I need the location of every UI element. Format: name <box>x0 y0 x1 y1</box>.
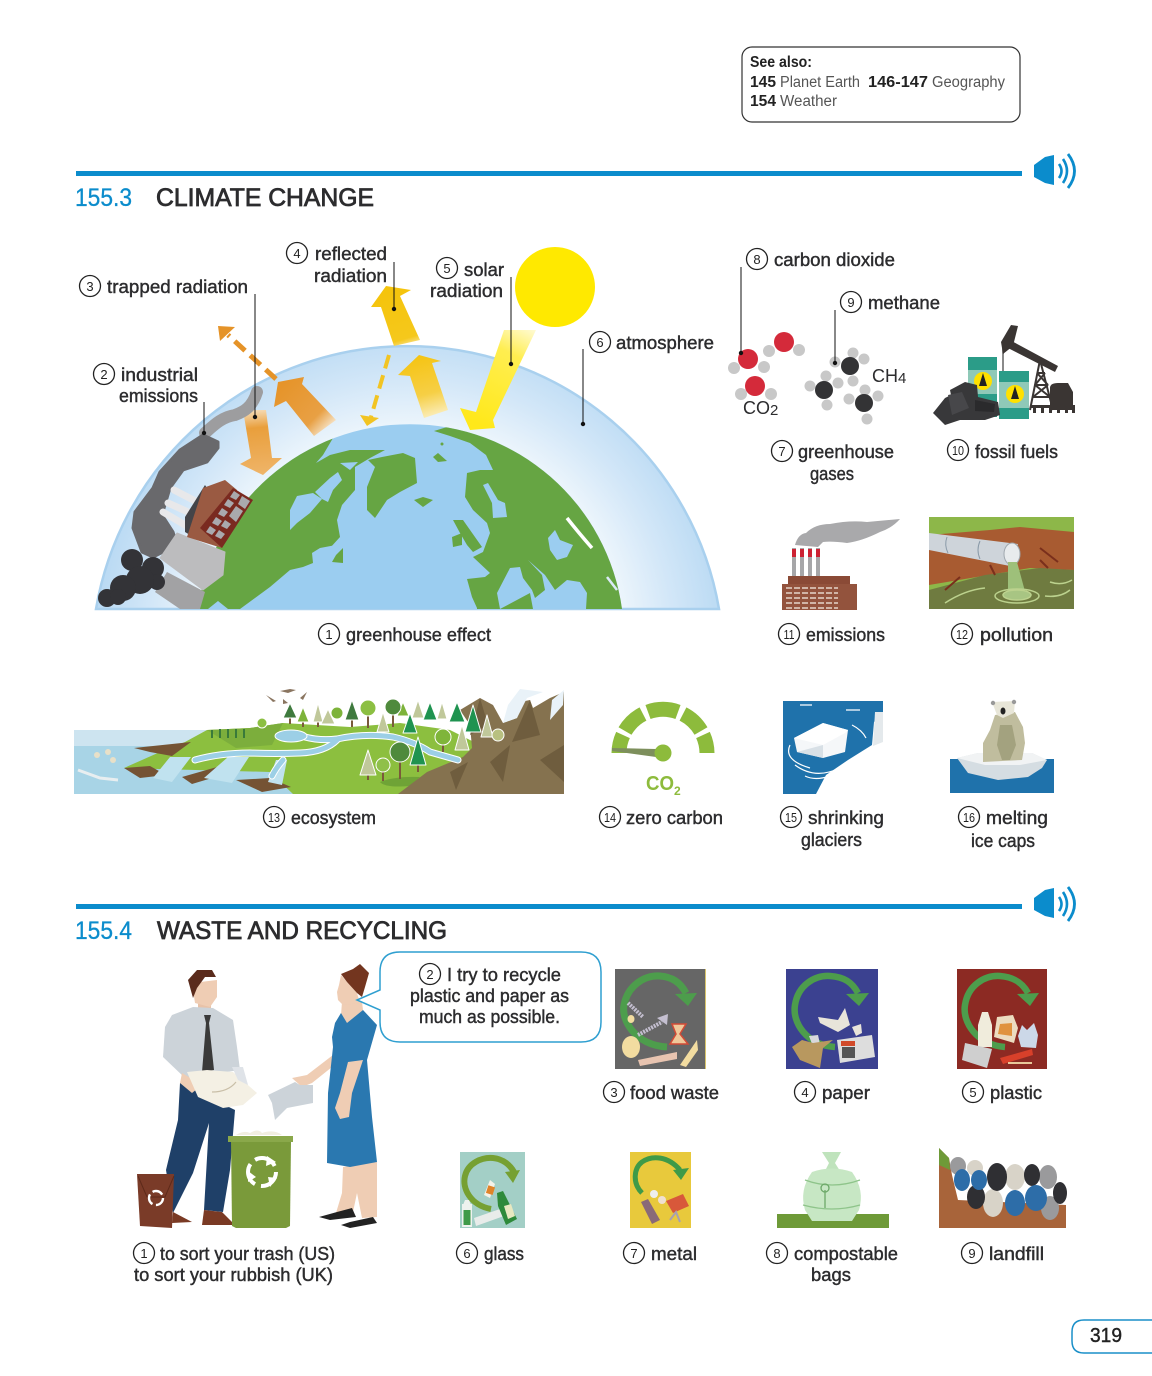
label: emissions: 11 <box>784 627 794 642</box>
leader: reflected radiation <box>392 262 396 311</box>
leader: methane <box>833 310 837 365</box>
illustration: polar bear on ice <box>950 700 1054 793</box>
illustration: carbon dioxide molecules <box>728 332 805 419</box>
arrow: dashed yellow <box>360 355 389 426</box>
label: greenhouse effect: 1 <box>325 627 333 642</box>
label: plastic: 5 <box>969 1085 977 1100</box>
icon: food waste <box>615 969 706 1069</box>
label: shrinking glaciers: shrinking <box>808 808 884 828</box>
icon: speaker 155.4 <box>1034 887 1074 921</box>
sun <box>515 247 595 327</box>
label: solar radiation: radiation <box>430 281 503 301</box>
speech bubble: I try to recycle <box>447 965 561 985</box>
label: emissions: emissions <box>806 625 885 645</box>
see also box: Weather <box>780 93 837 110</box>
label: metal: 7 <box>630 1246 638 1261</box>
leader: trapped radiation <box>253 294 257 419</box>
icon: compostable bag <box>777 1152 889 1228</box>
label: industrial emissions: 2 <box>100 367 108 382</box>
label: carbon dioxide: 8 <box>753 252 761 267</box>
label: plastic: plastic <box>990 1083 1042 1103</box>
label: paper: paper <box>822 1083 870 1103</box>
label: carbon dioxide: carbon dioxide <box>774 250 895 270</box>
label: shrinking glaciers <box>780 806 884 850</box>
illustration: pollution <box>929 517 1074 609</box>
label: industrial emissions: industrial <box>121 365 198 385</box>
arrow: dashed orange <box>218 326 276 379</box>
label: solar radiation <box>430 258 504 301</box>
icon: zero carbon gauge: CO <box>646 773 674 795</box>
label: metal <box>624 1242 697 1264</box>
heading: 155.4 waste and recycling: WASTE AND RECYCLING <box>157 917 447 945</box>
label: fossil fuels: fossil fuels <box>975 442 1058 462</box>
label: glass: glass <box>484 1244 524 1264</box>
label: melting ice caps: ice caps <box>971 831 1035 851</box>
see also box: 146-147 <box>868 74 928 91</box>
label: paper: 4 <box>801 1085 809 1100</box>
label: to sort your trash <box>134 1242 335 1285</box>
illustration: man sorting trash <box>163 970 257 1225</box>
illustration: fossil fuels <box>933 325 1075 425</box>
arrow: solar radiation <box>460 330 536 430</box>
speech bubble: much as possible. <box>419 1007 560 1027</box>
page number tab: 319 <box>1090 1325 1122 1347</box>
label: melting ice caps <box>958 806 1048 851</box>
see also box: Geography <box>932 74 1005 91</box>
label: pollution: pollution <box>980 625 1053 645</box>
see also box: 154 <box>750 93 776 110</box>
speech bubble: plastic and paper as <box>410 986 569 1006</box>
see also box <box>742 47 1020 122</box>
illustration: shrinking glaciers <box>783 701 883 794</box>
illustration: carbon dioxide molecules: CO <box>743 398 770 418</box>
label: compostable bags: compostable <box>794 1244 898 1264</box>
label: ecosystem <box>264 806 376 828</box>
label: shrinking glaciers: glaciers <box>801 830 862 850</box>
icon: zero carbon gauge <box>612 709 707 798</box>
label: melting ice caps: 16 <box>963 810 975 825</box>
label: industrial emissions <box>94 364 198 406</box>
illustration: methane molecules: 4 <box>898 370 906 387</box>
label: reflected radiation: reflected <box>315 244 387 264</box>
icon: zero carbon gauge: 2 <box>674 784 681 798</box>
arrow: radiation rising <box>398 355 448 418</box>
label: food waste: food waste <box>630 1083 719 1103</box>
label: pollution <box>952 624 1053 645</box>
illustration: carbon dioxide molecules: 2 <box>770 402 778 419</box>
label: trapped radiation: 3 <box>86 279 94 294</box>
label: pollution: 12 <box>956 627 968 642</box>
page number tab <box>1072 1320 1152 1353</box>
label: food waste: 3 <box>610 1085 618 1100</box>
leader: atmosphere <box>581 349 585 426</box>
label: solar radiation: 5 <box>443 261 451 276</box>
arrow: reflected radiation upper <box>371 286 420 346</box>
label: solar radiation: solar <box>464 260 504 280</box>
illustration: greenhouse effect globe <box>96 247 719 620</box>
label: shrinking glaciers: 15 <box>785 810 797 825</box>
label: ecosystem: 13 <box>268 810 280 825</box>
icon: glass <box>460 1152 525 1228</box>
illustration: ecosystem <box>74 689 564 794</box>
label: ecosystem: ecosystem <box>291 808 376 828</box>
earth <box>200 424 622 609</box>
leader: solar radiation <box>509 277 513 366</box>
label: trapped radiation: trapped radiation <box>107 277 248 297</box>
speech bubble: 2 <box>426 967 434 982</box>
label: atmosphere: 6 <box>596 335 604 350</box>
label: melting ice caps: melting <box>986 808 1048 828</box>
label: methane: methane <box>868 293 940 313</box>
label: glass: 6 <box>463 1246 471 1261</box>
label: landfill: landfill <box>989 1244 1044 1264</box>
label: glass <box>456 1242 524 1264</box>
icon: green recycling bin <box>228 1130 293 1228</box>
label: zero carbon: 14 <box>604 810 616 825</box>
heading: 155.4 waste and recycling: 155.4 <box>75 917 132 945</box>
label: compostable bags: bags <box>811 1265 851 1285</box>
label: plastic <box>962 1082 1042 1103</box>
illustration: methane molecules: CH <box>872 366 898 386</box>
label: to sort your trash: to sort your trash (US) <box>160 1244 335 1264</box>
label: landfill <box>962 1242 1044 1264</box>
label: greenhouse gases: gases <box>810 464 854 484</box>
label: to sort your trash: to sort your rubbish (UK) <box>134 1265 333 1285</box>
icon: metal <box>630 1152 691 1228</box>
label: paper <box>794 1082 870 1103</box>
label: fossil fuels: 10 <box>952 443 964 458</box>
heading: 155.3 climate change: CLIMATE CHANGE <box>156 184 374 212</box>
label: reflected radiation: 4 <box>293 246 301 261</box>
illustration: woman recycling <box>268 964 377 1228</box>
see also box: Planet Earth <box>780 74 860 91</box>
label: zero carbon: zero carbon <box>626 808 723 828</box>
label: greenhouse gases: greenhouse <box>798 442 894 462</box>
label: greenhouse effect: greenhouse effect <box>346 625 491 645</box>
arrow: orange up <box>274 377 336 436</box>
illustration: methane molecules <box>804 348 906 424</box>
label: metal: metal <box>651 1244 697 1264</box>
label: compostable bags: 8 <box>773 1246 781 1261</box>
illustration: emissions factory <box>782 519 900 610</box>
label: atmosphere: atmosphere <box>616 333 714 353</box>
see also box: 145 <box>750 74 776 91</box>
label: emissions <box>778 624 885 645</box>
label: reflected radiation: radiation <box>314 266 387 286</box>
icon: plastic <box>957 969 1047 1069</box>
label: methane: 9 <box>847 295 855 310</box>
label: methane <box>840 292 940 313</box>
label: to sort your trash: 1 <box>140 1246 148 1261</box>
icon: small brown bin <box>137 1174 174 1228</box>
industrial smoke and factory <box>98 392 257 609</box>
speech bubble <box>357 952 601 1042</box>
label: reflected radiation <box>286 242 387 286</box>
label: greenhouse gases <box>772 440 894 484</box>
label: landfill: 9 <box>968 1246 976 1261</box>
leader: carbon dioxide <box>739 267 743 355</box>
leader: industrial emissions <box>202 402 206 435</box>
arrow: orange down <box>240 410 282 475</box>
icon: landfill <box>939 1148 1067 1228</box>
see also box: See also: <box>750 54 812 71</box>
label: fossil fuels <box>948 440 1058 462</box>
icon: speaker 155.3 <box>1034 154 1074 188</box>
heading: 155.3 climate change: 155.3 <box>75 184 132 212</box>
label: industrial emissions: emissions <box>119 386 198 406</box>
icon: paper <box>786 969 878 1069</box>
label: compostable bags <box>766 1242 898 1285</box>
label: greenhouse gases: 7 <box>778 444 786 459</box>
atmosphere dome <box>96 346 719 609</box>
